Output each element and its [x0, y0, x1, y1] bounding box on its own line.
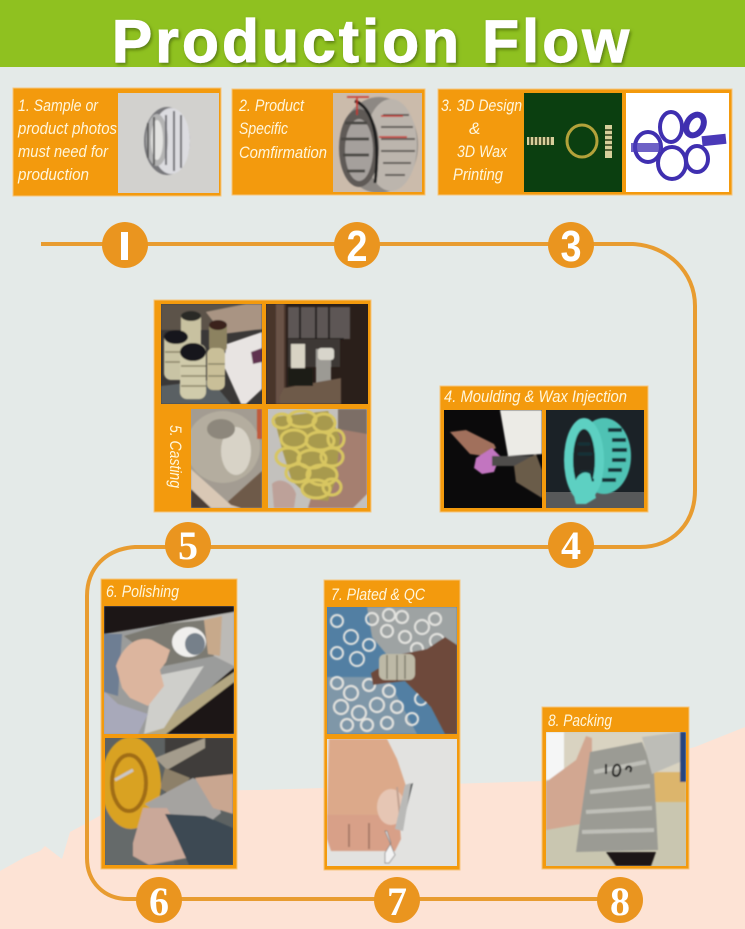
caption 7: 7. Plated & QC — [331, 585, 426, 604]
photo: packed bag — [546, 732, 686, 866]
photo: hand polishing ring — [104, 606, 234, 734]
panel 8: packing — [542, 707, 689, 869]
caption 2: Specific — [239, 119, 288, 138]
photo: gold ring tree — [268, 409, 367, 508]
step circle 5: 5 — [178, 523, 198, 568]
caption 1: 1. Sample or — [18, 96, 99, 115]
pink lower background — [0, 727, 745, 929]
step circle 3 — [548, 222, 594, 271]
photo: flasks — [161, 304, 262, 404]
step circle 2: 2 — [346, 222, 368, 271]
panel 4: moulding and wax injection — [440, 386, 648, 512]
panel 7: plated and QC — [324, 580, 460, 870]
panel 3: 3D design and wax printing — [438, 89, 732, 195]
flow line — [41, 244, 695, 899]
photo: polishing wheel — [105, 738, 233, 865]
caption 3: 3D Wax — [457, 142, 507, 161]
panel 2: product confirmation — [232, 89, 425, 195]
photo: kiln — [266, 304, 368, 404]
caption 1: must need for — [18, 142, 109, 161]
step circle 7 — [374, 877, 420, 924]
photo: ring quality check — [327, 739, 457, 866]
step circle 8 — [597, 877, 643, 924]
caption 8: 8. Packing — [548, 711, 612, 730]
step circle 6: 6 — [149, 879, 169, 924]
photo: plated rings — [327, 607, 457, 734]
caption 3: 3. 3D Design — [441, 96, 522, 115]
panel 1: sample photos — [13, 88, 221, 196]
photo: teal wax ring — [546, 410, 644, 508]
title: Production Flow — [112, 8, 629, 75]
caption 5: 5. Casting — [166, 425, 185, 488]
photo: ring with red measurement marks — [333, 93, 422, 192]
image: green CAD views — [524, 93, 622, 192]
caption 1: product photos — [17, 119, 117, 138]
step circle 1 — [102, 222, 148, 268]
photo: mould injection — [444, 410, 542, 508]
caption 2: 2. Product — [238, 96, 305, 115]
image: blue wax rings — [626, 93, 729, 192]
step circle 5 — [165, 522, 211, 568]
caption 1 — [17, 96, 117, 184]
step circle 8: 8 — [610, 879, 630, 924]
step circle 7: 7 — [387, 879, 407, 924]
step circle 4: 4 — [561, 523, 581, 568]
step circle 3: 3 — [560, 222, 582, 271]
caption 3: Printing — [453, 165, 503, 184]
caption 1: production — [17, 165, 89, 184]
panel 5: casting — [154, 300, 371, 512]
photo: glass bell — [191, 409, 262, 508]
caption 2: Comfirmation — [239, 143, 327, 162]
caption 3 — [441, 96, 522, 184]
caption 4: 4. Moulding & Wax Injection — [444, 387, 627, 406]
step circle 6 — [136, 877, 182, 924]
caption 3: & — [469, 119, 480, 138]
photo: sample ring — [118, 93, 219, 193]
caption 6: 6. Polishing — [106, 582, 179, 601]
step circle 2 — [334, 222, 380, 271]
step circle 4 — [548, 522, 594, 568]
caption 2 — [238, 96, 327, 162]
panel 6: polishing — [101, 579, 237, 869]
header band — [0, 0, 745, 67]
